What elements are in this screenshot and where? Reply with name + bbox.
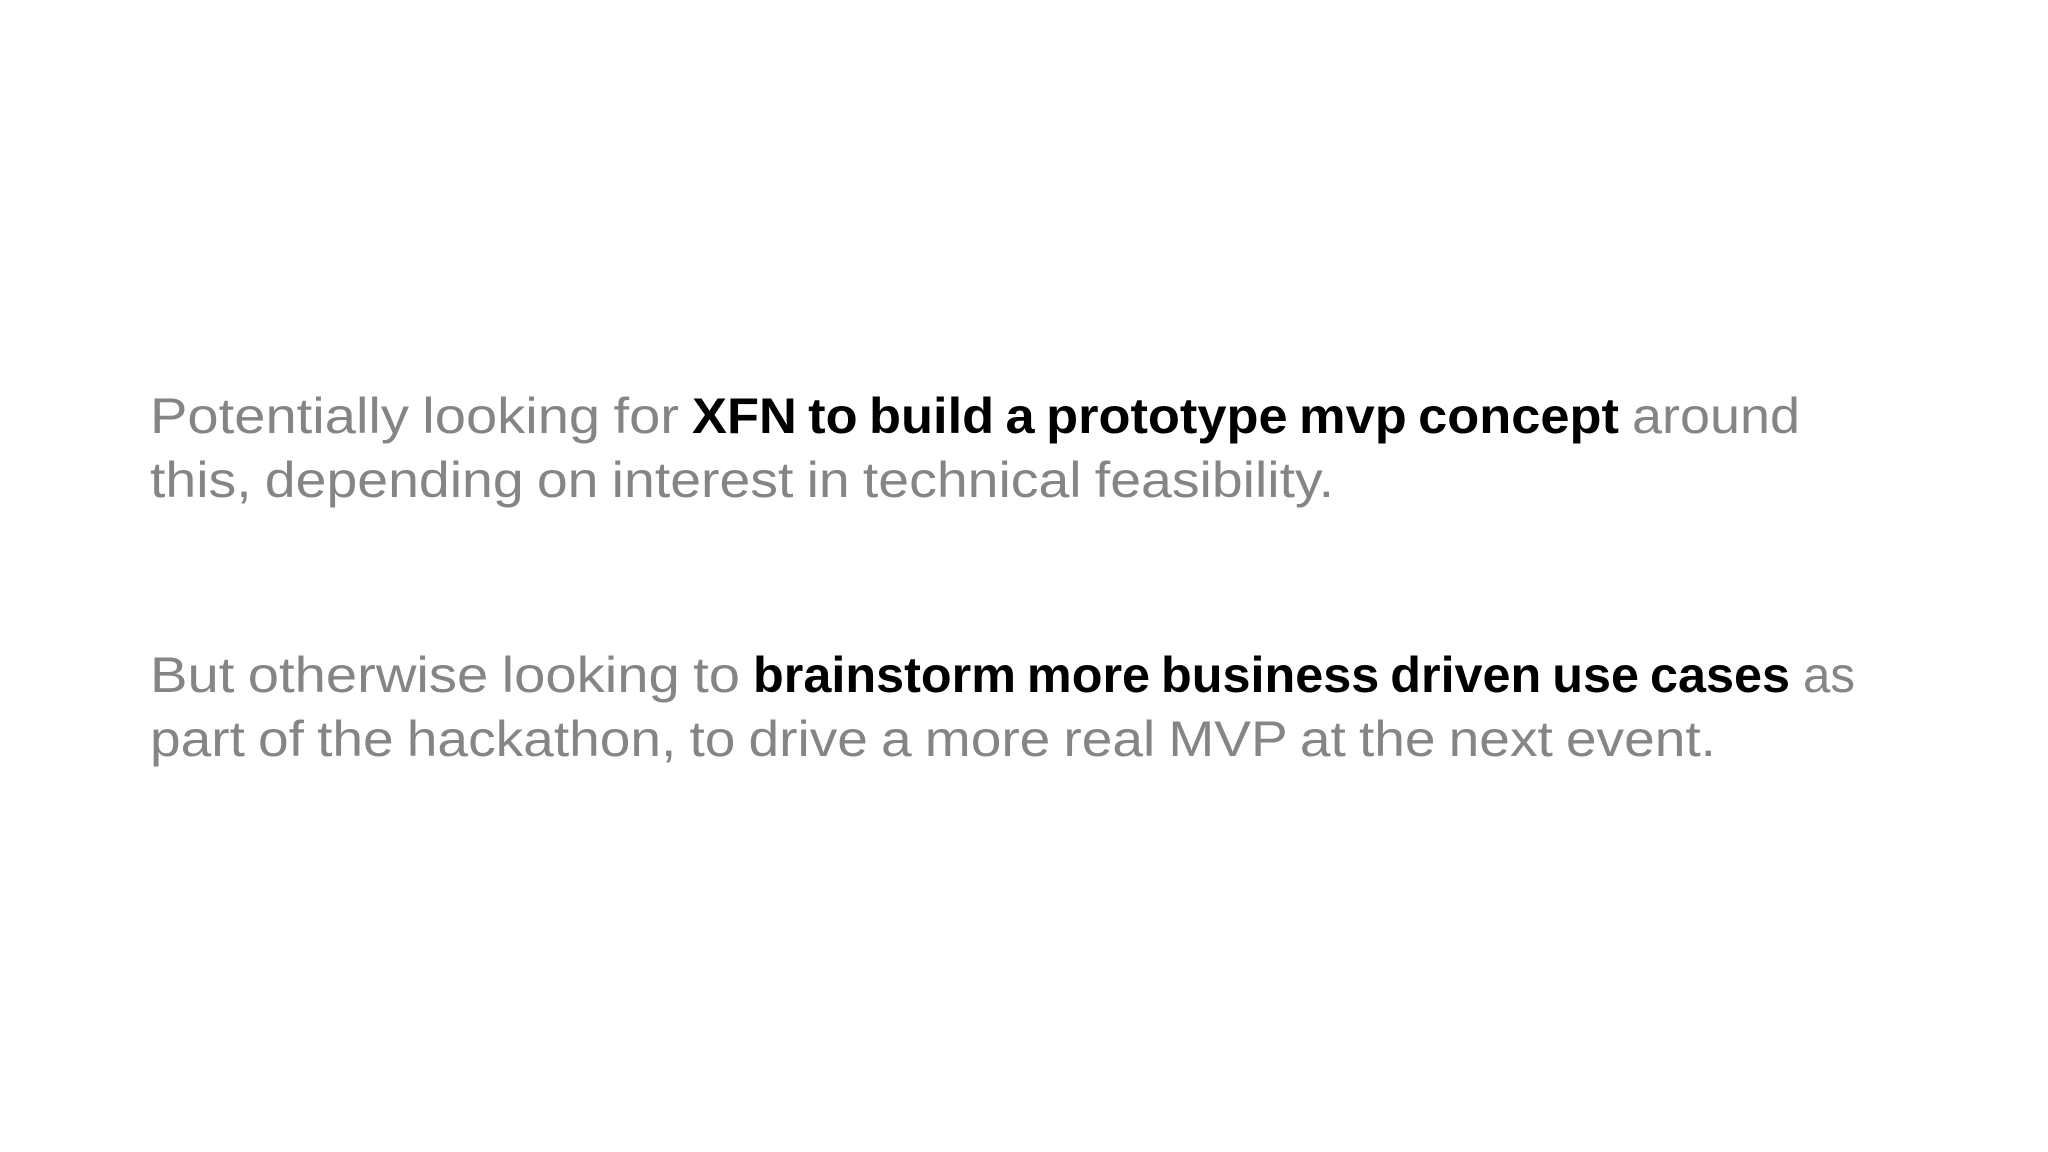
text block: brainstorm paragraph: part of the hackathon, to drive a more real MVP at the next event. xyxy=(150,711,1716,767)
text block: XFN prototype paragraph: around xyxy=(1632,388,1800,444)
text block: XFN prototype paragraph: Potentially looking for xyxy=(150,388,679,444)
text block: XFN prototype paragraph: this, depending on interest in technical feasibility. xyxy=(150,452,1334,508)
text block: brainstorm paragraph: as xyxy=(1803,647,1855,703)
text block: brainstorm paragraph xyxy=(150,647,1855,767)
text block: XFN prototype paragraph: XFN to build a prototype mvp concept xyxy=(692,388,1619,444)
text block: brainstorm paragraph: brainstorm more business driven use cases xyxy=(753,647,1790,703)
text block: XFN prototype paragraph xyxy=(150,388,1800,508)
text block: brainstorm paragraph: But otherwise looking to xyxy=(150,647,740,703)
